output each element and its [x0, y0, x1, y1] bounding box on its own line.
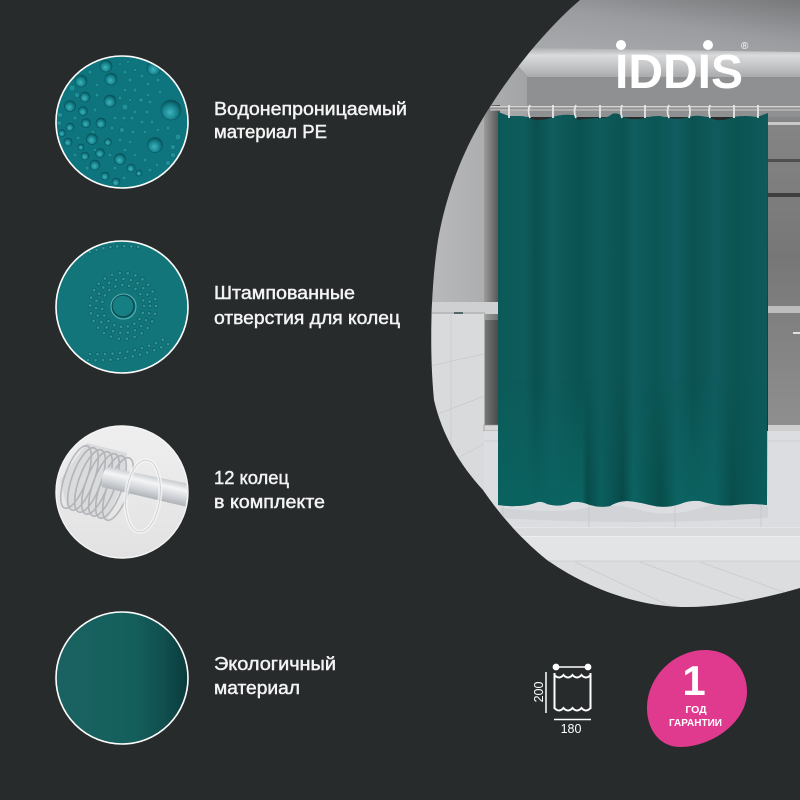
back wall — [527, 77, 800, 117]
bath ledge — [484, 425, 500, 431]
circle: rod and rings — [54, 426, 195, 558]
feature 1: droplets — [56, 56, 407, 188]
feature 3: rings — [54, 426, 325, 558]
text: eco material — [214, 654, 336, 698]
floor tiles — [548, 561, 800, 607]
photo: bathroom with curtain — [420, 0, 800, 611]
icon: curtain outline — [554, 665, 590, 710]
circle: water drops — [56, 56, 188, 188]
text: 12 rings: в комплекте — [214, 492, 325, 512]
badge blob — [647, 650, 747, 747]
right wall — [768, 117, 800, 427]
circle: stamped hole — [56, 241, 188, 373]
cornice molding — [518, 48, 800, 77]
warranty number: 1 — [682, 657, 706, 704]
warranty text: ГОД — [685, 704, 707, 716]
text: eco material: Экологичный — [214, 654, 336, 674]
curtain lower folds — [498, 431, 768, 507]
tiled wall — [431, 314, 485, 493]
warranty text — [669, 704, 722, 729]
single ring — [124, 466, 162, 534]
feature 4: eco material — [56, 612, 336, 744]
circle: fabric swatch — [56, 612, 188, 744]
text: 12 rings: 12 колец — [214, 468, 289, 488]
text: eco material: материал — [214, 678, 300, 698]
ceiling — [528, 0, 800, 54]
text: stamped holes: отверстия для колец — [214, 308, 400, 328]
rod — [102, 467, 187, 506]
curtain shadow — [500, 502, 768, 522]
bath front — [484, 431, 800, 529]
coil of rings — [60, 443, 127, 520]
warranty text: ГАРАНТИИ — [669, 717, 722, 729]
text: waterproof: Водонепроницаемый — [214, 99, 407, 119]
width label: 180 — [561, 722, 581, 736]
text: stamped holes — [214, 283, 400, 328]
warranty badge — [647, 650, 747, 747]
text: 12 rings — [214, 468, 325, 512]
curtain rings — [509, 105, 758, 118]
shower rod — [490, 106, 800, 110]
height label: 200 — [532, 682, 546, 702]
dado strip — [432, 302, 498, 314]
logo: IDDIS — [615, 46, 743, 99]
text: waterproof — [214, 99, 407, 142]
floor edge — [512, 527, 800, 562]
text: stamped holes: Штампованные — [214, 283, 355, 303]
curtain — [498, 110, 769, 510]
left wall — [431, 66, 527, 320]
logo: ® — [741, 41, 749, 52]
text: waterproof: материал РЕ — [214, 122, 327, 142]
size icon — [532, 665, 591, 736]
dimension lines — [546, 672, 591, 720]
feature 2: stamped holes — [56, 241, 400, 373]
niche — [484, 105, 500, 305]
